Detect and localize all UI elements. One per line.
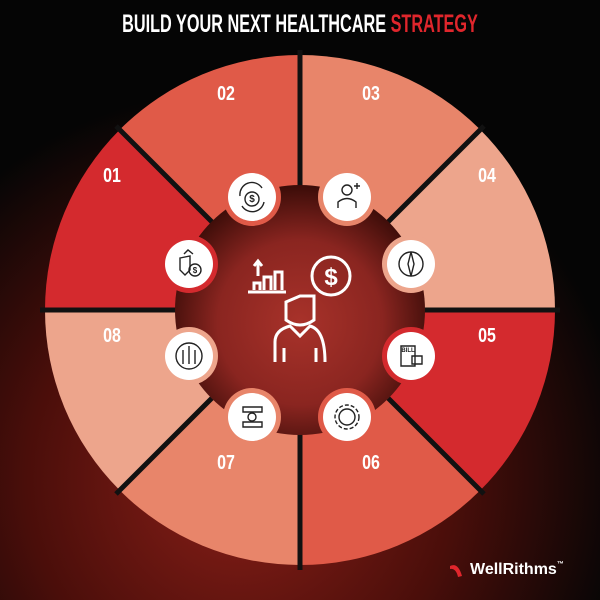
numbers: 05 [478, 324, 496, 346]
numbers: 02 [217, 82, 235, 104]
icon badges [160, 168, 440, 446]
numbers [103, 82, 496, 473]
logo: WellRithms™ [470, 561, 564, 578]
wheel diagram: $ [193, 266, 198, 275]
numbers: 01 [103, 164, 121, 186]
wheel diagram: $ [324, 264, 338, 291]
wheel diagram: BILL [401, 348, 415, 354]
numbers: 06 [362, 451, 380, 473]
segments [40, 50, 560, 570]
center icon: person with chart and dollar [248, 257, 350, 362]
badge glyphs [176, 182, 423, 429]
numbers: 07 [217, 451, 235, 473]
wheel diagram: $ [249, 194, 255, 205]
numbers: 04 [478, 164, 496, 186]
numbers: 03 [362, 82, 380, 104]
numbers: 08 [103, 324, 121, 346]
title: BUILD YOUR NEXT HEALTHCARE STRATEGY [122, 10, 478, 38]
inner circle [175, 185, 425, 435]
